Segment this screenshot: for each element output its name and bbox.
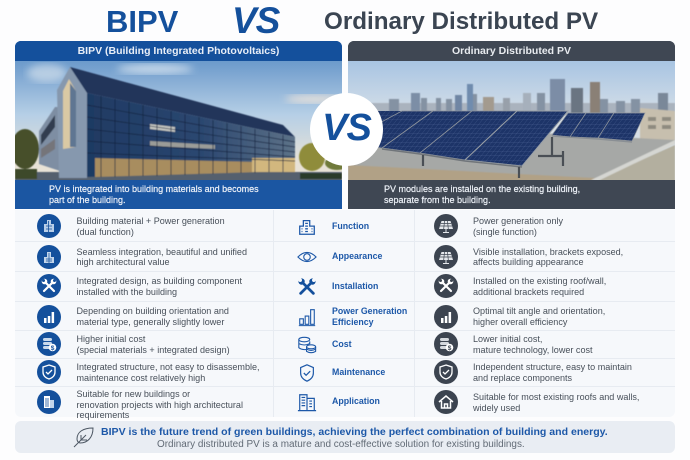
text: BIPV function — [76, 216, 225, 237]
label: Cost: Cost — [332, 339, 352, 349]
icon: leaf — [74, 428, 94, 448]
label: Application: Application — [332, 396, 380, 406]
title: Ordinary Distributed PV: Ordinary Distributed PV — [324, 8, 598, 35]
icon: BIPV appearance building — [37, 245, 61, 269]
text: BIPV function: (dual function) — [76, 227, 134, 237]
text: ordinary installation — [473, 276, 606, 297]
neighbouring building — [640, 108, 675, 143]
text: BIPV application: requirements — [76, 410, 129, 420]
label: Appearance: Appearance — [332, 251, 382, 261]
icon: ordinary PV panel — [434, 214, 458, 238]
text: ordinary cost: mature technology, lower cost — [473, 345, 593, 355]
text: ordinary application — [473, 392, 639, 413]
text: ordinary function — [473, 216, 563, 237]
text: ordinary installation: additional brackets required — [473, 287, 584, 297]
gable — [57, 67, 87, 178]
text: ordinary maintenance — [473, 362, 632, 383]
icon: BIPV cost coins — [37, 332, 61, 356]
label: Power Generation Efficiency: Power Generation — [332, 306, 407, 316]
icon: ordinary application house — [434, 390, 458, 414]
text: BIPV efficiency: material type, generally slightly lower — [76, 317, 224, 327]
caption: Ordinary PV: separate from the building. — [384, 195, 491, 205]
caption: Ordinary PV — [348, 180, 675, 209]
icon: application building — [298, 394, 316, 412]
text: BIPV appearance — [76, 246, 247, 267]
icon: ordinary installation tools — [434, 274, 458, 298]
icon: ordinary cost coins — [434, 332, 458, 356]
label: Power Generation Efficiency: Efficiency — [332, 317, 374, 327]
panel: Ordinary PV image header — [348, 41, 675, 209]
text: ordinary appearance: Visible installation, brackets exposed, — [473, 246, 623, 256]
text: BIPV maintenance: maintenance cost relatively high — [76, 373, 205, 383]
illustration: BIPV glass building — [15, 61, 342, 180]
icon: BIPV maintenance shield — [37, 360, 61, 384]
title: VS brush lettering: VS — [232, 0, 279, 41]
text: BIPV maintenance: Integrated structure, not easy to disassemble, — [76, 362, 260, 372]
label: Maintenance: Maintenance — [332, 367, 385, 377]
text: BIPV appearance: Seamless integration, beautiful and unified — [76, 246, 247, 256]
text: ordinary maintenance: Independent structure, easy to maintain — [473, 362, 632, 372]
roof deck — [348, 133, 675, 180]
text: ordinary cost: Lower initial cost, — [473, 334, 542, 344]
text: BIPV application — [76, 389, 243, 420]
heading: Ordinary PV panel — [348, 41, 675, 61]
icon: efficiency bars — [298, 309, 316, 326]
text: ordinary function: (single function) — [473, 227, 537, 237]
heading: BIPV panel: BIPV (Building Integrated Photovoltaics) — [78, 45, 279, 57]
text: ordinary efficiency: higher overall efficiency — [473, 317, 567, 327]
icon: BIPV function building — [37, 214, 61, 238]
caption: BIPV — [15, 180, 342, 209]
text: BIPV application: Suitable for new buildings or — [76, 389, 190, 399]
text: ordinary appearance — [473, 246, 623, 267]
caption: BIPV: PV is integrated into building materials and becomes — [49, 184, 259, 194]
label: Power Generation Efficiency — [332, 306, 407, 327]
text: BIPV installation — [76, 276, 242, 297]
text: conclusion subline: Ordinary distributed PV is a mature and cost-effective solution for existing buildings. — [157, 439, 525, 450]
side wing — [39, 107, 60, 171]
icon: BIPV installation tools — [37, 274, 61, 298]
icon: ordinary appearance panel — [434, 245, 458, 269]
text: BIPV efficiency — [76, 306, 229, 327]
text: BIPV application: renovation projects with high architectural — [76, 400, 243, 410]
title: BIPV: BIPV — [106, 4, 178, 39]
comparison table — [15, 210, 675, 417]
panel: conclusion footer — [15, 421, 675, 453]
icon: maintenance shield — [300, 364, 314, 382]
text: ordinary installation: Installed on the existing roof/wall, — [473, 276, 606, 286]
text: BIPV installation: installed with the building — [76, 287, 177, 297]
trees — [11, 129, 39, 169]
label: Function: Function — [332, 221, 369, 231]
icon: installation tools — [298, 278, 316, 295]
illustration: rooftop solar array — [348, 61, 675, 180]
text: BIPV cost: Higher initial cost — [76, 334, 145, 344]
text: ordinary application: widely used — [473, 403, 520, 413]
text: ordinary cost — [473, 334, 593, 355]
caption: BIPV: part of the building. — [49, 195, 126, 205]
label: Installation: Installation — [332, 281, 378, 291]
text: conclusion headline: BIPV is the future trend of green buildings, achieving the perfect combination of building and energy. — [101, 426, 608, 438]
panel: BIPV image header — [15, 41, 342, 209]
text: ordinary function: Power generation only — [473, 216, 563, 226]
glass facade — [87, 93, 295, 177]
badge: central VS circle: VS — [322, 107, 371, 149]
icon: ordinary efficiency bars — [434, 305, 458, 329]
heading: Ordinary PV panel: Ordinary Distributed PV — [452, 45, 571, 57]
caption: Ordinary PV: PV modules are installed on the existing building, — [384, 184, 580, 194]
badge: central VS circle — [310, 93, 383, 166]
heading: BIPV panel — [15, 41, 342, 61]
text: BIPV function: Building material + Power generation — [76, 216, 225, 226]
text: BIPV cost — [76, 334, 230, 355]
text: ordinary efficiency — [473, 306, 605, 327]
text: BIPV efficiency: Depending on building orientation and — [76, 306, 229, 316]
text: BIPV maintenance — [76, 362, 260, 383]
icon: cost coins — [298, 336, 316, 354]
text: ordinary appearance: affects building appearance — [473, 257, 584, 267]
text: BIPV appearance: high architectural value — [76, 257, 170, 267]
front solar row — [338, 111, 402, 156]
icon: BIPV cost coins: $ — [51, 345, 55, 352]
ground — [15, 172, 342, 181]
icon: appearance eye — [297, 252, 317, 262]
icon: BIPV application building — [37, 390, 61, 414]
back solar row — [552, 113, 586, 137]
text: BIPV installation: Integrated design, as building component — [76, 276, 242, 286]
brackets — [423, 137, 563, 178]
text: BIPV cost: (special materials + integrated design) — [76, 345, 230, 355]
skyline — [348, 103, 675, 115]
icon: ordinary cost coins: $ — [448, 345, 452, 352]
icon: function — [299, 220, 315, 235]
text: ordinary efficiency: Optimal tilt angle and orientation, — [473, 306, 605, 316]
roof — [70, 67, 295, 137]
text: ordinary application: Suitable for most existing roofs and walls, — [473, 392, 639, 402]
text: ordinary maintenance: and replace components — [473, 373, 572, 383]
icon: ordinary maintenance shield — [434, 360, 458, 384]
icon: BIPV efficiency bars — [37, 305, 61, 329]
